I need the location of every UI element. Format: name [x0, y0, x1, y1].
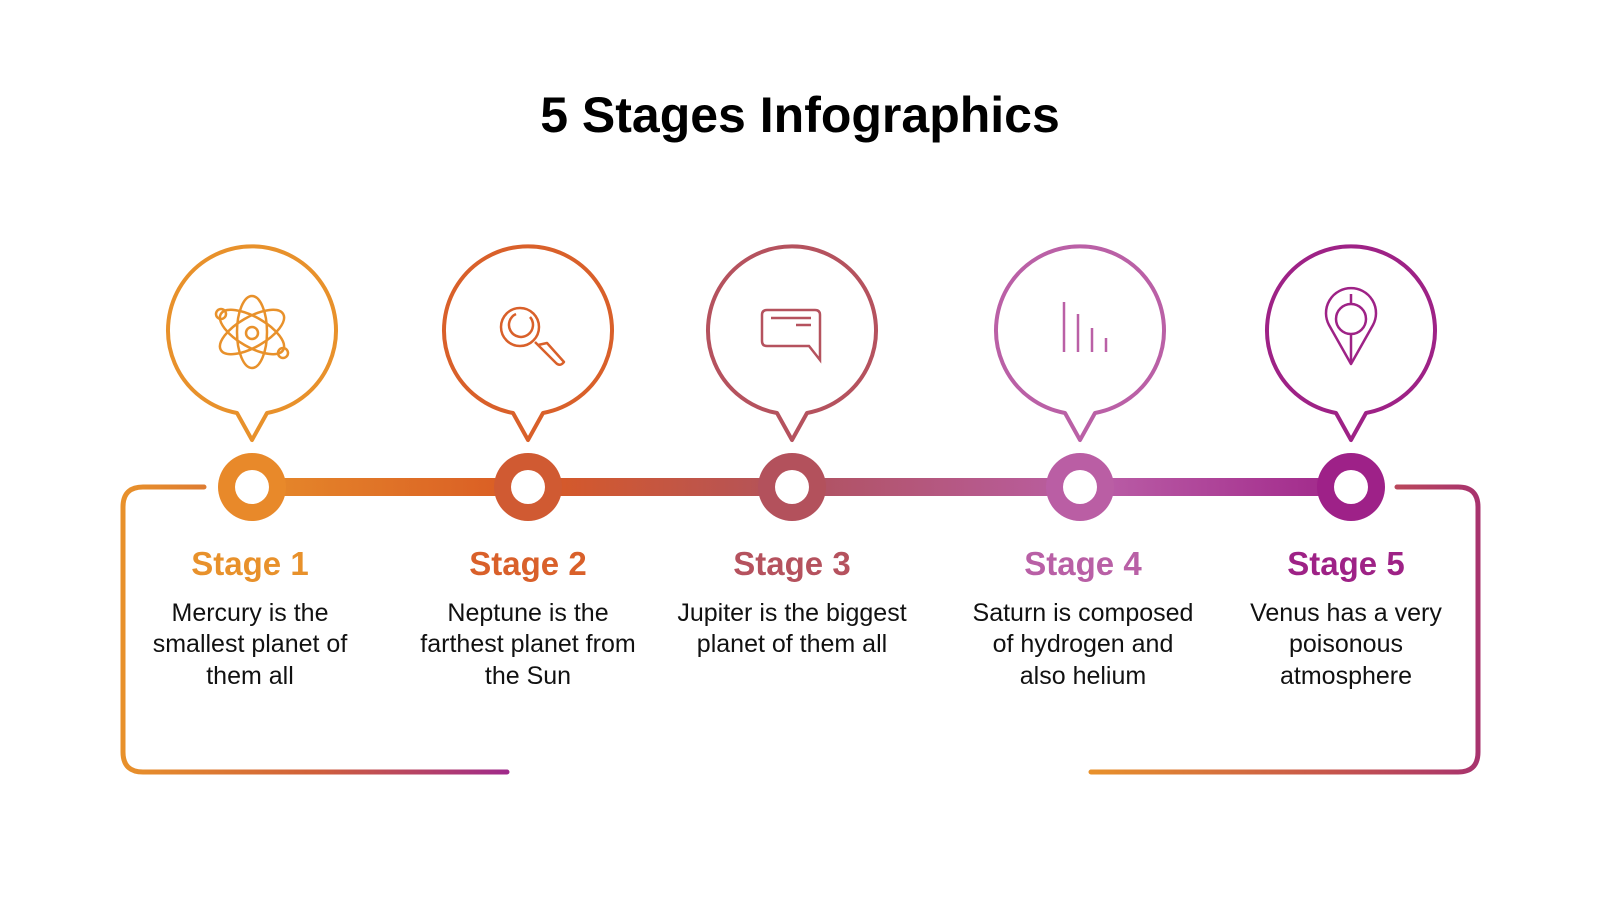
descriptions: planet of them all — [697, 630, 887, 658]
balloon 2 — [444, 246, 612, 440]
right bracket — [1091, 487, 1478, 772]
descriptions: Saturn is composed — [973, 599, 1193, 627]
descriptions: smallest planet of — [153, 630, 347, 658]
descriptions: Jupiter is the biggest — [677, 599, 907, 627]
balloon 4 — [996, 246, 1164, 440]
descriptions: Venus has a very — [1250, 599, 1442, 627]
balloon 3 — [708, 246, 876, 440]
descriptions: of hydrogen and — [993, 630, 1173, 658]
stage labels — [191, 545, 1405, 582]
descriptions: the Sun — [485, 662, 571, 690]
left bracket — [123, 487, 507, 772]
title: 5 Stages Infographics — [540, 87, 1060, 143]
stage labels: Stage 3 — [733, 545, 851, 582]
descriptions: poisonous — [1289, 630, 1403, 658]
descriptions: farthest planet from — [420, 630, 636, 658]
stage labels: Stage 2 — [469, 545, 587, 582]
stage labels: Stage 4 — [1024, 545, 1142, 582]
descriptions: them all — [206, 662, 294, 690]
icon: location pin — [1326, 288, 1376, 364]
stage labels: Stage 1 — [191, 545, 309, 582]
icon: atom — [213, 296, 291, 368]
descriptions: Mercury is the — [172, 599, 328, 627]
icon: chat — [762, 310, 820, 360]
descriptions: Neptune is the — [447, 599, 609, 627]
icon: bar chart — [1064, 302, 1106, 352]
balloon 1 — [168, 246, 336, 440]
timeline bar — [218, 453, 1385, 521]
icon: magnifier — [501, 308, 564, 365]
descriptions — [153, 599, 1442, 690]
descriptions: also helium — [1020, 662, 1146, 690]
stage labels: Stage 5 — [1287, 545, 1405, 582]
descriptions: atmosphere — [1280, 662, 1412, 690]
balloon 5 — [1267, 246, 1435, 440]
